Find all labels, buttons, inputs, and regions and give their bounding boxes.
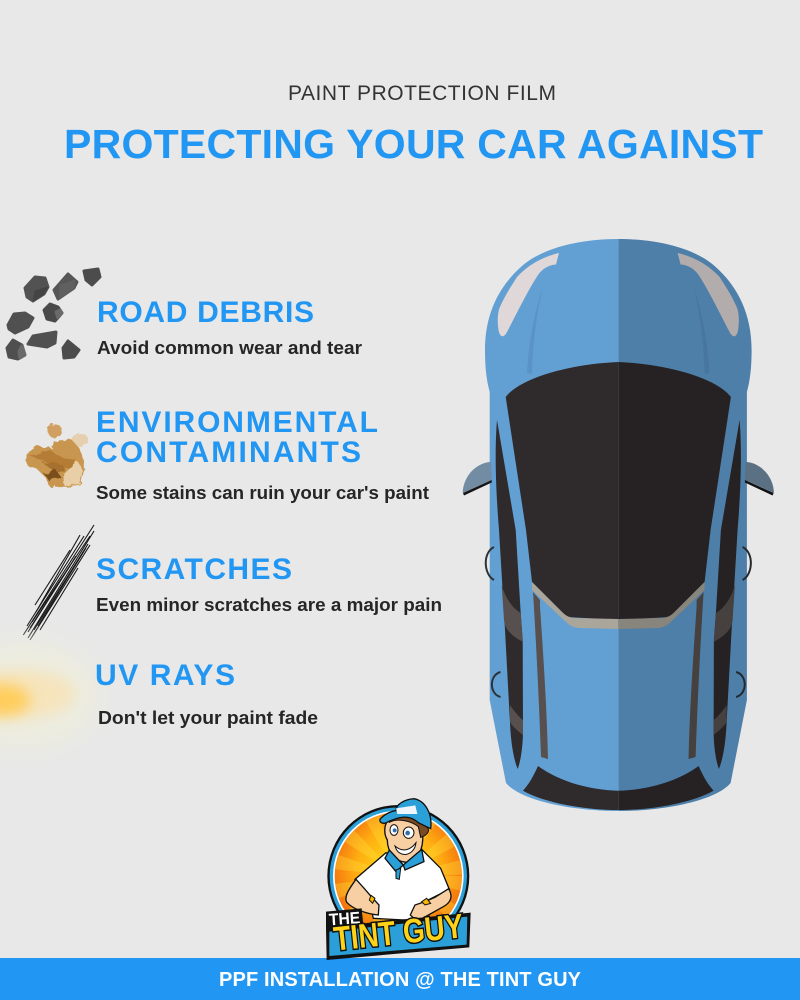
heading: UV rays: UV RAYS bbox=[95, 659, 235, 692]
footer text: PPF INSTALLATION @ THE TINT GUY bbox=[219, 969, 582, 991]
title: PROTECTING YOUR CAR AGAINST bbox=[64, 121, 763, 167]
subtitle: PAINT PROTECTION FILM bbox=[288, 82, 556, 105]
heading: road debris: ROAD DEBRIS bbox=[97, 296, 314, 329]
heading: environmental contaminants bbox=[96, 406, 378, 469]
footer bar bbox=[0, 958, 800, 1000]
text: UV description: Don't let your paint fade bbox=[98, 708, 318, 728]
logo: The Tint Guy bbox=[326, 799, 471, 960]
icon: UV sun glow bbox=[0, 640, 100, 750]
text: road debris description: Avoid common wear and tear bbox=[97, 338, 362, 358]
logo: The Tint Guy: THE bbox=[328, 908, 361, 929]
heading: environmental contaminants: ENVIRONMENTAL bbox=[96, 406, 378, 439]
heading: environmental contaminants: CONTAMINANTS bbox=[96, 436, 361, 469]
icon: environmental stain bbox=[23, 424, 88, 487]
icon: scratches bbox=[23, 525, 94, 640]
illustration: blue car top view bbox=[463, 239, 774, 811]
logo: The Tint Guy: TINT GUY bbox=[332, 907, 465, 959]
text: environmental description: Some stains can ruin your car's paint bbox=[96, 483, 429, 503]
text: scratches description: Even minor scratches are a major pain bbox=[96, 595, 442, 615]
icon: road debris rocks bbox=[7, 269, 100, 359]
heading: scratches: SCRATCHES bbox=[96, 553, 292, 586]
